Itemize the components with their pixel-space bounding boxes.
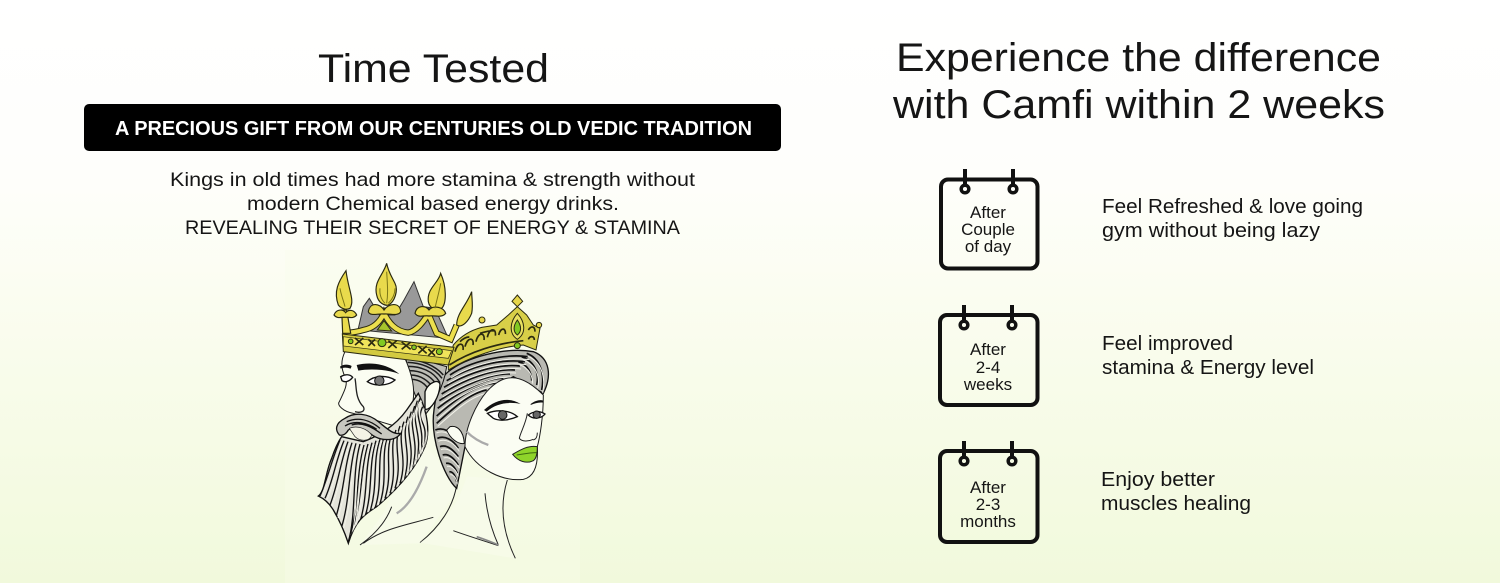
queen face	[465, 378, 543, 480]
icon: calendar after couple of day	[941, 169, 1038, 268]
arches	[343, 313, 457, 339]
banner: precious gift	[84, 104, 781, 151]
illustration backdrop	[285, 250, 580, 583]
icon: calendar after 2-3 months: After	[970, 478, 1006, 497]
grey spires	[358, 282, 448, 338]
heading: experience the difference: Experience the difference	[896, 36, 1381, 80]
text block: kings description: modern Chemical based energy drinks.	[247, 193, 619, 215]
king neck and shoulder	[360, 447, 457, 545]
text: feel refreshed: Feel Refreshed & love going	[1102, 196, 1363, 218]
illustration: king and queen	[317, 263, 550, 558]
king crown	[334, 263, 472, 365]
king beard	[318, 393, 428, 543]
icon: calendar after 2-4 weeks	[940, 305, 1038, 405]
icon: calendar after 2-4 weeks: After	[970, 340, 1006, 359]
band	[342, 334, 454, 365]
text: feel improved: Feel improved	[1102, 333, 1233, 355]
queen lips	[513, 446, 537, 462]
text: enjoy better: Enjoy better	[1101, 469, 1215, 491]
text: feel refreshed: gym without being lazy	[1102, 220, 1320, 242]
flames	[334, 263, 472, 333]
text: feel improved	[1102, 333, 1314, 379]
icon: calendar after 2-4 weeks: weeks	[963, 375, 1012, 394]
king face	[339, 352, 414, 427]
king ear	[425, 382, 440, 409]
icon: calendar after 2-4 weeks: 2-4	[976, 358, 1000, 377]
text: enjoy better: muscles healing	[1101, 493, 1251, 515]
queen hair and braid	[433, 350, 548, 488]
queen neck	[420, 477, 515, 558]
text block: kings description	[170, 169, 696, 239]
text: enjoy better	[1101, 469, 1251, 515]
king moustache	[337, 414, 401, 440]
text block: kings description: REVEALING THEIR SECRET OF ENERGY & STAMINA	[185, 217, 680, 239]
icon: calendar after 2-3 months: months	[960, 512, 1016, 531]
banner: precious gift: A PRECIOUS GIFT FROM OUR CENTURIES OLD VEDIC TRADITION	[115, 118, 752, 140]
icon: calendar after couple of day: After	[970, 203, 1006, 222]
heading: Time Tested: Time Tested	[318, 47, 549, 91]
icon: calendar after 2-3 months: 2-3	[976, 495, 1000, 514]
king hair	[405, 355, 447, 417]
king lip	[349, 427, 372, 440]
icon: calendar after 2-3 months	[940, 441, 1038, 542]
icon: calendar after couple of day: of day	[965, 237, 1012, 256]
text block: kings description: Kings in old times had more stamina & strength without	[170, 169, 696, 191]
text: feel improved: stamina & Energy level	[1102, 357, 1314, 379]
queen crown	[448, 295, 542, 370]
heading: experience the difference	[892, 36, 1385, 127]
text: feel refreshed	[1102, 196, 1363, 242]
heading: experience the difference: with Camfi within 2 weeks	[892, 83, 1385, 127]
icon: calendar after couple of day: Couple	[961, 220, 1015, 239]
